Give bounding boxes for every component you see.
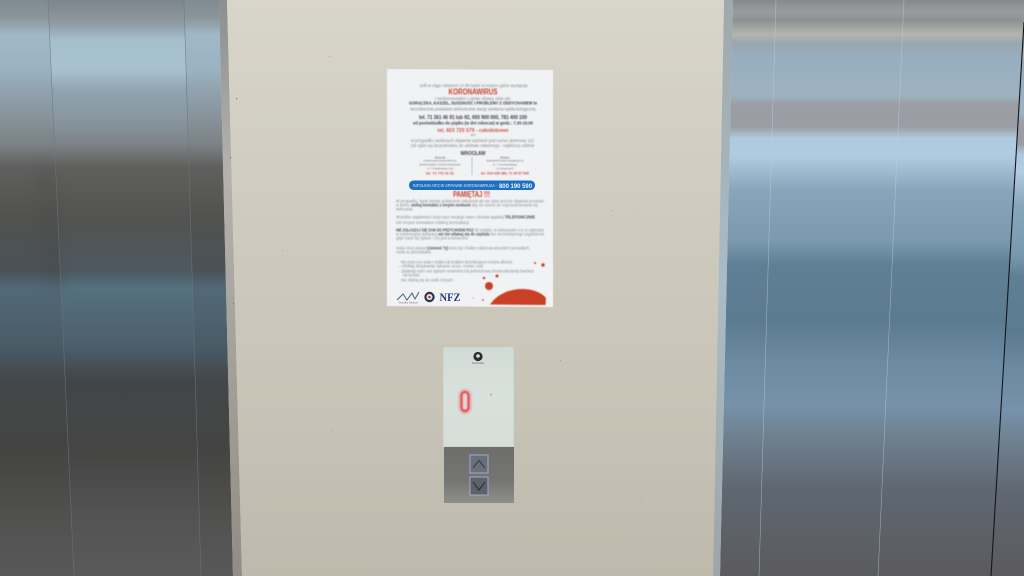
brand logo: Schindler (472, 361, 484, 365)
logo: AMZ (397, 292, 419, 304)
metal button plate (444, 447, 514, 503)
poster top text: w przypadku nasilonych objawów zadzwoń pod numer alarmowy 112 (411, 138, 534, 143)
hospital: adults: Dorośli (435, 156, 445, 160)
brand logo (472, 352, 484, 365)
heading: pamiętaj: PAMIĘTAJ !!! (453, 190, 490, 199)
hospital: children: tel. 519 338 486, 71 39 57 530 (481, 172, 529, 176)
poster top text: WROCŁAW (460, 151, 486, 157)
poster body text: - Myj często ręce wodą z mydłem lub środkiem dezynfekującym na bazie alkoholu. (399, 260, 513, 264)
poster top text: jeśli w ciągu ostatnich 14 dni byłeś w miejscu gdzie występuje (419, 83, 528, 88)
poster sheet (387, 69, 553, 307)
hospital: adults: Klinika Pediatrii i Chorób Infekcyjnych (420, 162, 461, 166)
hospital: children (481, 156, 529, 176)
left elevator door (0, 0, 233, 576)
poster top text: KORONAWIRUS (448, 88, 498, 96)
poster body text: osób w poczekalni. (396, 250, 432, 254)
glass display (443, 347, 514, 447)
hospital: adults: Uniwersytecki Szpital Kliniczny (424, 158, 457, 162)
poster top text: GORĄCZKA, KASZEL, DUSZNOŚĆ I PROBLEMY Z ODDYCHANIEM to (409, 98, 537, 106)
hospital: adults: ul. T. Chałubińskiego 2-2a (427, 166, 453, 170)
NFZ helpline pill: 800 190 590 (499, 183, 532, 190)
poster body text: Jeden chory pacjent (ciemnoć Ty) może być źródłem zakażenia wszystkich pozostałych, (396, 246, 530, 250)
poster body text: lub kichasz (403, 272, 420, 278)
poster: koronawirus (387, 69, 553, 307)
right elevator door (720, 0, 1024, 576)
poster body text: - Nie zbliżaj się do osób chorych (399, 278, 454, 282)
poster top text: lub zgłoś się bezpośrednio do oddziału zakaźnego - najbliższy oddział (411, 143, 534, 148)
poster body text: wirusa. (396, 206, 414, 212)
hospital: adults (420, 156, 461, 176)
poster body text: w domu, unikaj kontaktu z innymi osobami aby nie doszło do rozprzestrzeniania się (396, 202, 539, 208)
poster top text: lub (470, 133, 476, 137)
poster top text: tel. 603 720 579 - całodobowo (438, 128, 509, 134)
elevator call panel (443, 347, 514, 503)
indicator dot (490, 393, 492, 396)
hospital: children: im. J. Gromkowskiego (493, 162, 517, 166)
poster body text (396, 198, 545, 282)
poster top text (409, 83, 537, 157)
poster body text: gdyż masz się zgłosić i czy jest to konieczne (396, 236, 469, 240)
right door frame (713, 0, 733, 576)
concrete wall column (227, 0, 724, 576)
column divider (471, 157, 473, 175)
up button (470, 455, 488, 473)
poster body text: w ewidencyjnej deklaracji ani nie udawaj się do szpitala bez wcześniejszego uzgodnienia (396, 232, 545, 236)
hospital: adults: tel. 71 770 31 51 (426, 172, 454, 176)
NFZ helpline pill: INFOLINIA NFZ W SPRAWIE KORONAWIRUSA - (413, 183, 498, 188)
hospital: children: Wojewódzki Szpital Specjalistyczny (486, 158, 524, 162)
logo: seal (424, 292, 435, 302)
poster body text: W przypadku, kiedy istnieje podejrzenie zakażenia ale nie masz jeszcze objawów pozostań (396, 198, 545, 204)
hospital: children: ul. Koszarowa 5 (496, 166, 514, 170)
hospital: children: Dzieci (501, 156, 510, 160)
logo: AMZ: Wrocław Medical (399, 302, 418, 304)
poster body text: - Unikaj dotykania rękami oczu, nosa i ust. (399, 264, 484, 268)
poster body text: lub innymi metodami zdalnej konsultacji. (396, 220, 470, 225)
poster top text: bezzwłocznie powiadom telefonicznie stację sanitarno-epidemiologiczną (410, 106, 536, 112)
left door frame (219, 0, 242, 576)
poster body text: NIE ZGŁASZAJ SIĘ SAM DO PRZYCHODNI POZ lub szpitala, ze wskazaniem o to co zgłaszasz (396, 228, 544, 232)
poster top text: i zaobserwowałeś u siebie objawy, takie jak: (435, 96, 511, 101)
poster body text: - Zasłaniaj usta i nos zgiętym ramieniem lub jednorazową chusteczką kiedy kaszlesz (399, 268, 534, 274)
poster top text: od poniedziałku do piątku (w dni robocze) w godz.: 7.30-15.00 (413, 120, 533, 126)
poster top text: tel. 71 361 46 91 lub 92, 693 900 000, 781 400 100 (419, 115, 527, 121)
NFZ helpline pill (409, 180, 535, 190)
logo: NFZ: NFZ (440, 290, 460, 304)
virus decoration (472, 262, 546, 305)
floor indicator (461, 392, 469, 412)
down button (470, 477, 488, 495)
poster body text: Wszelkie wątpliwości dotyczące swojego stanu zdrowia wyjaśnij TELEFONICZNIE (396, 214, 535, 220)
